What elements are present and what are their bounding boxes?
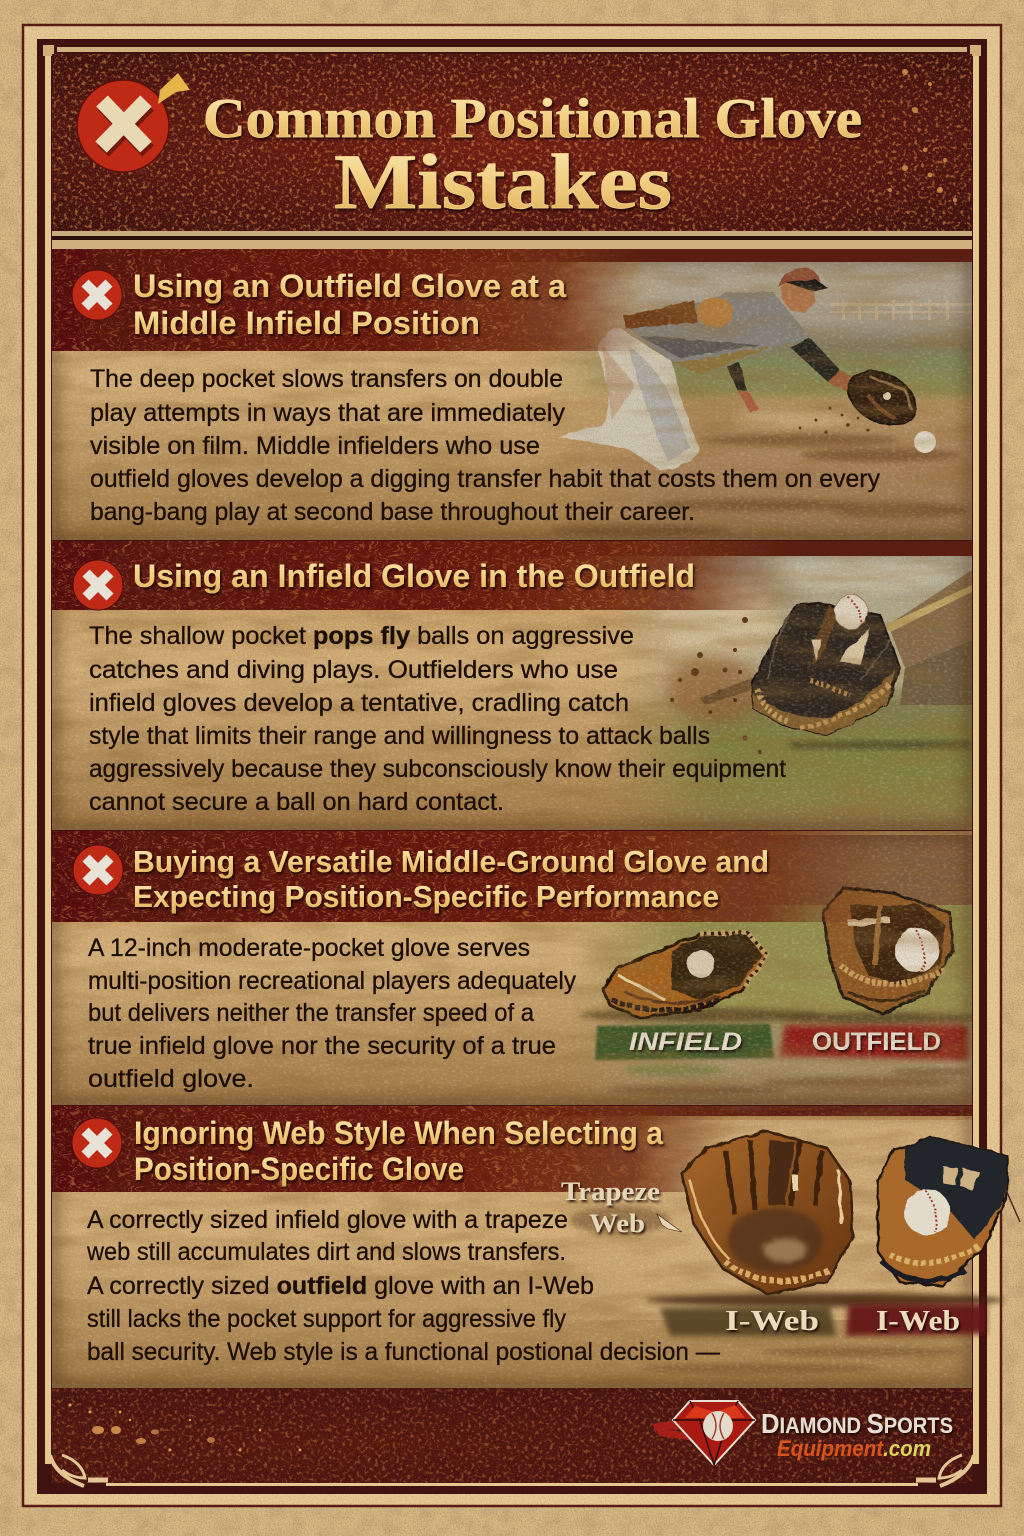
body text: web still accumulates dirt and slows transfers. xyxy=(86,1238,566,1266)
icon: x xyxy=(72,1118,122,1168)
icon: x xyxy=(73,845,123,895)
scene: infield and outfield gloves xyxy=(570,835,980,1104)
label: outfield: OUTFIELD xyxy=(812,1028,941,1056)
scene: diving fielder xyxy=(540,262,972,540)
heading xyxy=(134,274,570,338)
panel: footer xyxy=(50,1388,974,1486)
heading: Buying a Versatile Middle-Ground Glove and xyxy=(133,844,769,879)
icon: dark glove xyxy=(752,595,900,735)
label: infield: INFIELD xyxy=(629,1028,742,1056)
icon: i-web glove large xyxy=(682,1131,853,1294)
header band xyxy=(35,1095,735,1205)
body text xyxy=(90,365,880,526)
heading: Expecting Position-Specific Performance xyxy=(133,879,719,914)
body text: multi-position recreational players adequately xyxy=(88,967,576,995)
body text xyxy=(88,934,576,1093)
body text: cannot secure a ball on hard contact. xyxy=(89,788,504,816)
label: outfield xyxy=(780,1025,968,1060)
heading: Ignoring Web Style When Selecting a xyxy=(134,1115,663,1151)
label: i-web left: I-Web xyxy=(725,1305,819,1337)
label: i-web left xyxy=(660,1305,836,1337)
icon: x xyxy=(73,560,123,610)
panel: mistake 2 xyxy=(35,530,972,830)
title: Mistakes xyxy=(334,138,672,225)
title: Common Positional Glove xyxy=(203,88,862,150)
texture xyxy=(52,249,972,540)
icon: infield glove xyxy=(603,932,767,1018)
body text: still lacks the pocket support for aggressive fly xyxy=(87,1305,566,1333)
panel: mistake 3 xyxy=(35,820,980,1105)
icon: i-web glove dark xyxy=(878,1137,1007,1286)
body text: A correctly sized infield glove with a trapeze xyxy=(87,1206,568,1234)
body text: outfield gloves develop a digging transfer habit that costs them on every xyxy=(90,465,880,493)
baseball xyxy=(914,431,936,453)
shadow xyxy=(790,741,972,749)
stadium xyxy=(888,570,972,668)
body text: The shallow pocket pops fly balls on aggressive xyxy=(89,622,634,650)
body text: The deep pocket slows transfers on double xyxy=(90,365,563,393)
header band xyxy=(35,530,972,625)
title xyxy=(203,88,862,225)
shadow strip under gloves xyxy=(645,1293,1005,1307)
icon: outfield glove xyxy=(823,888,953,1014)
panel: mistake 4 xyxy=(35,1095,1020,1388)
label: i-web right xyxy=(846,1304,986,1337)
texture xyxy=(52,831,972,1105)
heading xyxy=(133,844,769,914)
label: infield xyxy=(595,1024,774,1060)
body text: visible on film. Middle infielders who use xyxy=(90,432,540,460)
icon: x xyxy=(72,270,122,320)
body text: but delivers neither the transfer speed of a xyxy=(88,999,534,1027)
body text: A correctly sized outfield glove with an I-Web xyxy=(87,1272,594,1300)
body text: outfield glove. xyxy=(88,1065,254,1093)
callout: trapeze web: Web xyxy=(589,1209,645,1238)
header band xyxy=(52,249,972,351)
body text xyxy=(89,622,786,816)
icon: red x with arrow xyxy=(77,73,190,172)
body text: ball security. Web style is a functional postional decision — xyxy=(87,1338,720,1366)
body text: A 12-inch moderate-pocket glove serves xyxy=(88,934,530,962)
callout: trapeze web xyxy=(561,1177,682,1238)
label: i-web right: I-Web xyxy=(876,1305,960,1337)
body text: infield gloves develop a tentative, cradling catch xyxy=(89,689,629,717)
bottom rule and corner curls xyxy=(50,1455,974,1486)
logo text: DIAMOND SPORTS xyxy=(761,1408,953,1439)
dirt streaks xyxy=(550,434,970,535)
heading: Middle Infield Position xyxy=(133,305,480,341)
body text: aggressively because they subconsciously know their equipment xyxy=(89,755,786,783)
body text: catches and diving plays. Outfielders who use xyxy=(89,656,618,684)
logo: diamond with baseball xyxy=(652,1401,755,1465)
callout: trapeze web: Trapeze xyxy=(561,1177,660,1206)
texture xyxy=(52,1106,972,1388)
dirt spray xyxy=(667,656,763,724)
scene: glove in outfield xyxy=(610,556,972,830)
heading xyxy=(134,1115,663,1187)
panel: mistake 1 xyxy=(35,235,972,540)
body text xyxy=(86,1206,720,1366)
body text: true infield glove nor the security of a true xyxy=(88,1032,556,1060)
body text: bang-bang play at second base throughout their career. xyxy=(90,498,695,526)
logo text: Equipment.com xyxy=(777,1436,931,1461)
logo text xyxy=(761,1408,953,1461)
glove lace xyxy=(1006,1190,1020,1222)
texture xyxy=(52,541,972,830)
body text: style that limits their range and willingness to attack balls xyxy=(89,722,710,750)
heading: Using an Infield Glove in the Outfield xyxy=(133,558,695,594)
fielder xyxy=(558,268,925,470)
heading: Using an Outfield Glove at a xyxy=(133,268,566,304)
body text: play attempts in ways that are immediately xyxy=(90,399,565,427)
header band xyxy=(35,820,885,935)
panel: header xyxy=(52,54,972,231)
stadium fence xyxy=(830,300,972,320)
heading: Position-Specific Glove xyxy=(134,1151,464,1187)
